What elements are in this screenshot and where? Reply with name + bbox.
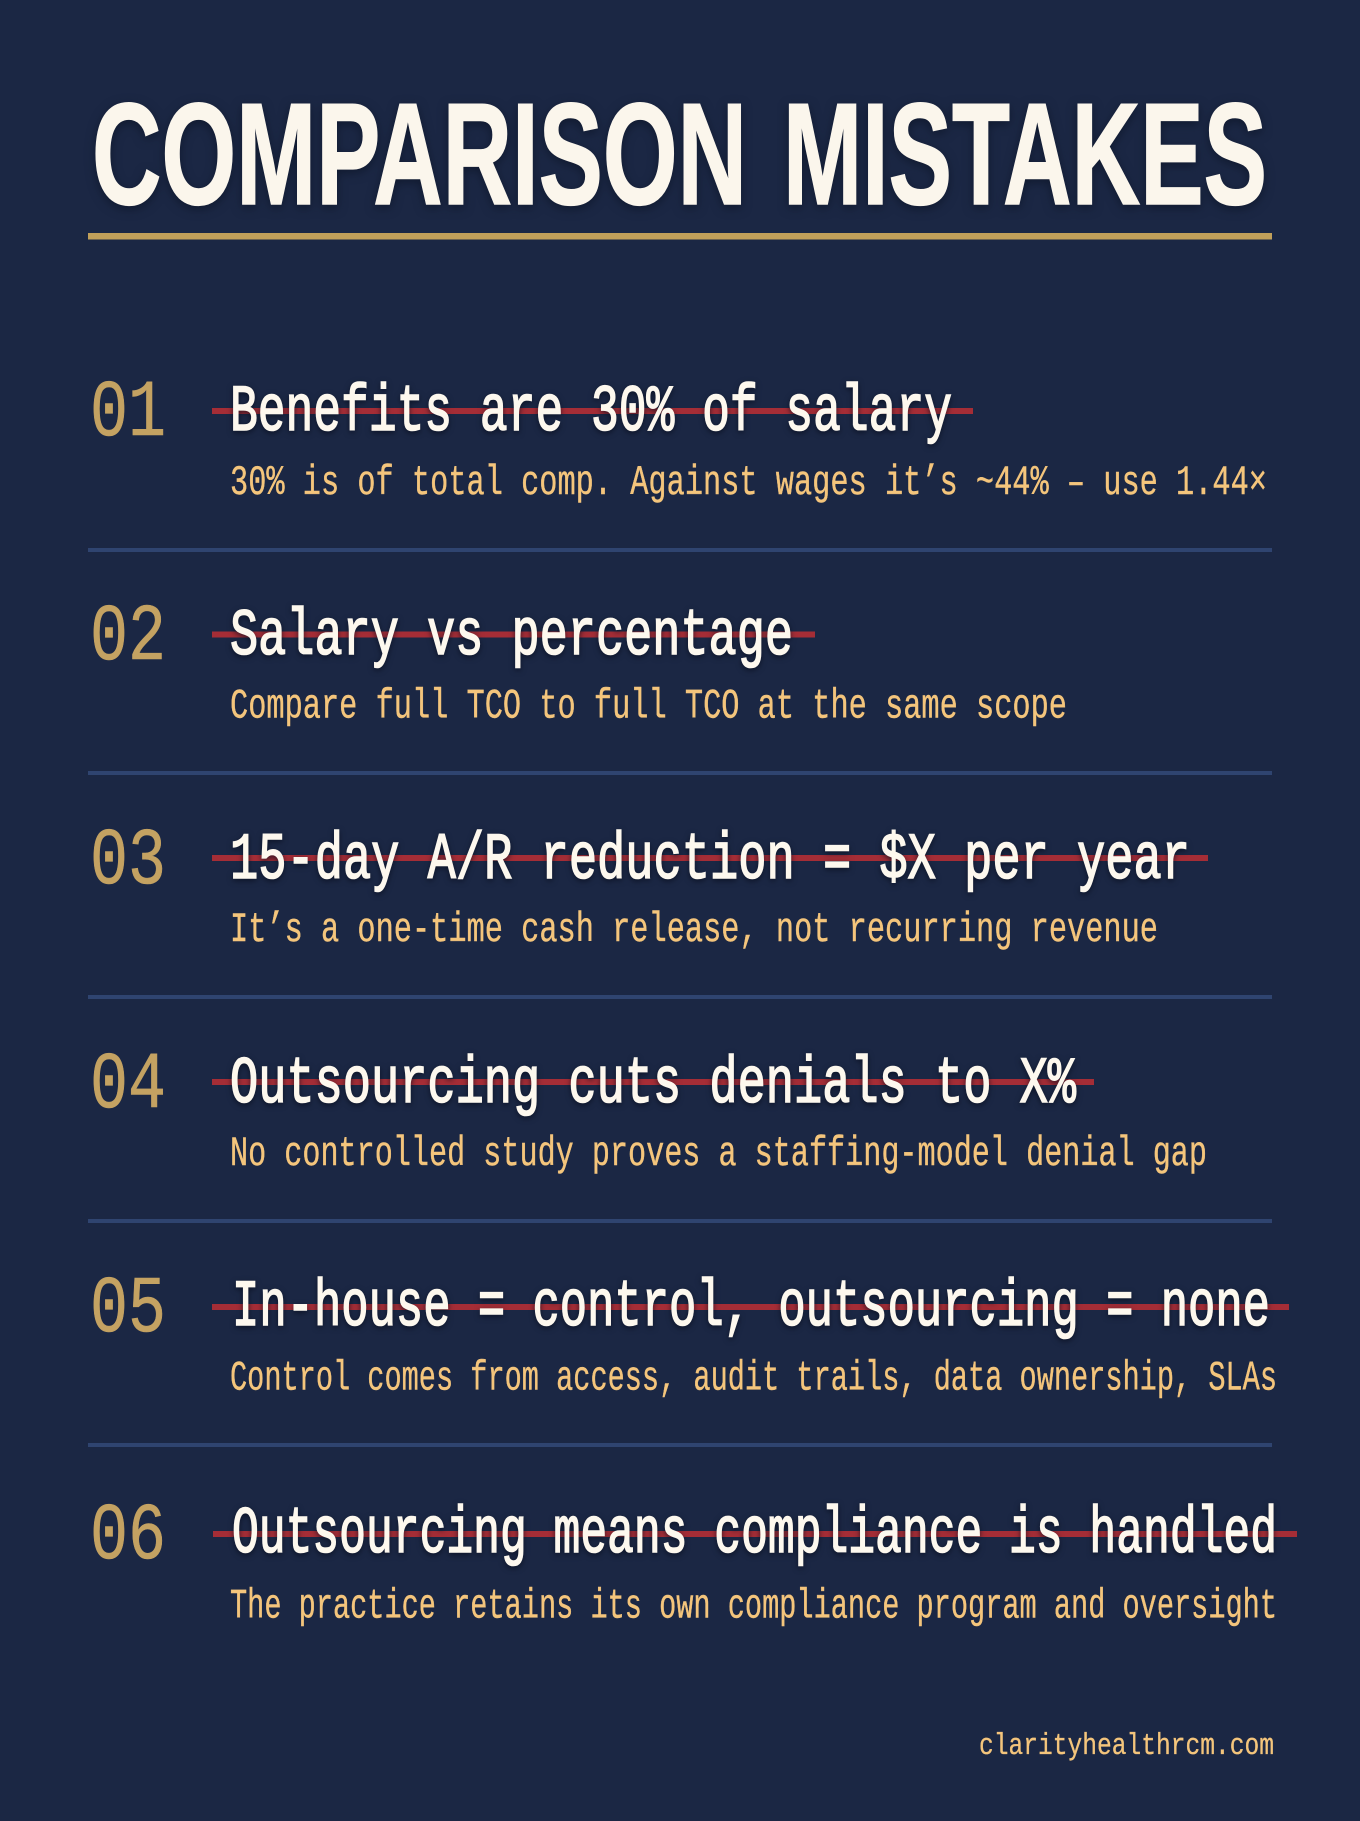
row 02 <box>90 593 1067 730</box>
number 01: 01 <box>90 369 166 460</box>
strikethrough 01 <box>212 408 973 414</box>
row 06 <box>90 1492 1297 1630</box>
row 05 <box>90 1265 1289 1402</box>
number 04: 04 <box>90 1041 166 1132</box>
strikethrough 02 <box>212 632 815 638</box>
number 06: 06 <box>90 1492 166 1583</box>
row 03 <box>90 817 1208 954</box>
strikethrough 04 <box>212 1079 1094 1085</box>
footer url: clarityhealthrcm.com <box>979 1729 1274 1764</box>
heading 01: Benefits are 30% of salary <box>230 375 952 450</box>
row 01 <box>90 369 1267 507</box>
title underline <box>88 233 1272 240</box>
number 03: 03 <box>90 817 166 908</box>
description 02: Compare full TCO to full TCO at the same scope <box>230 682 1067 730</box>
title: COMPARISON <box>92 73 747 235</box>
strikethrough 05 <box>212 1304 1289 1310</box>
number 02: 02 <box>90 593 166 684</box>
row 04 <box>90 1041 1207 1178</box>
strikethrough 06 <box>213 1531 1297 1537</box>
heading 02: Salary vs percentage <box>230 599 793 674</box>
strikethrough 03 <box>212 855 1208 861</box>
number 05: 05 <box>90 1265 166 1356</box>
